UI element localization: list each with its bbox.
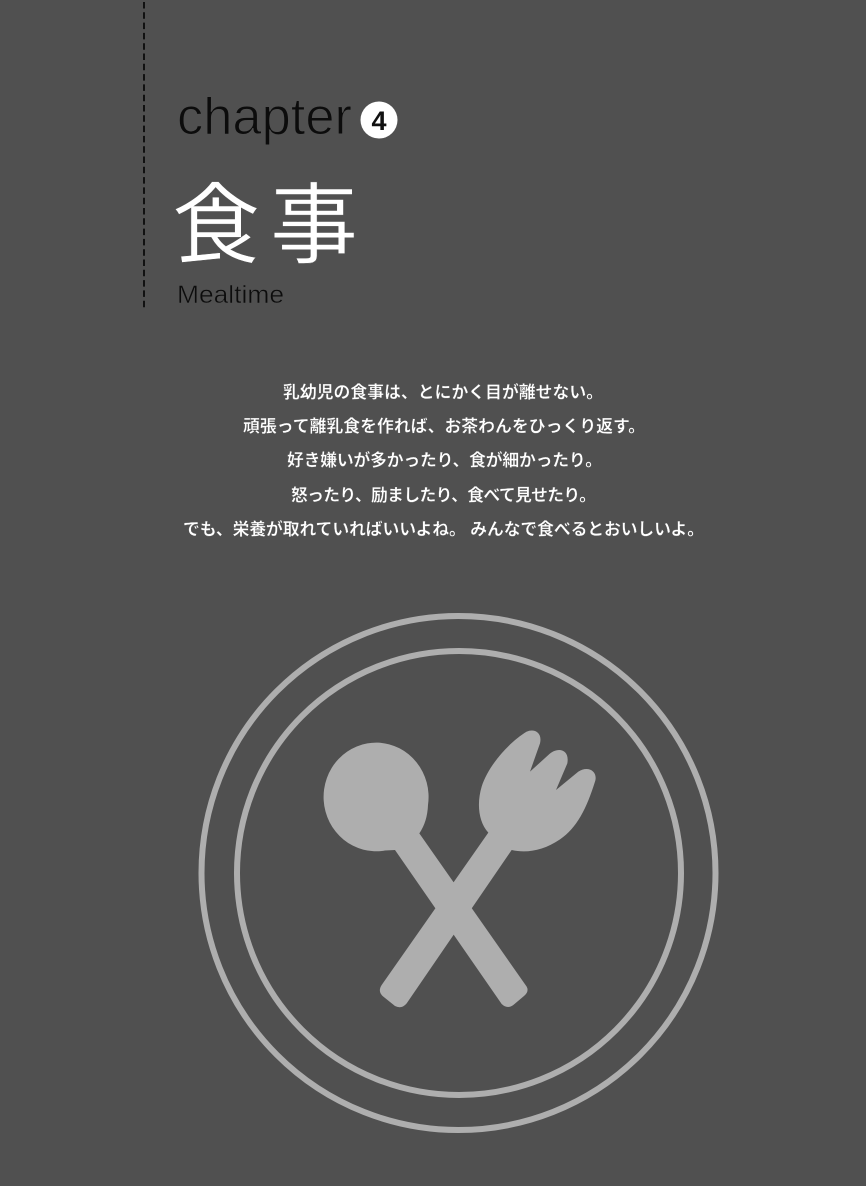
intro text block: 怒ったり、励ましたり、食べて見せたり。 [291, 486, 596, 505]
plate outer ring [202, 616, 716, 1130]
intro text block: でも、栄養が取れていればいいよね。 みんなで食べるとおいしいよ。 [183, 519, 704, 539]
heading: chapter label: chapter [177, 88, 352, 146]
icon: spoon [324, 743, 528, 1007]
intro text block: 乳幼児の食事は、とにかく目が離せない。 [283, 382, 603, 402]
icon: plate with spoon and fork [202, 616, 716, 1130]
plate inner ring [237, 651, 681, 1095]
icon: fork [380, 730, 596, 1007]
title: 食事: 食事 [172, 176, 358, 275]
subtitle: Mealtime: Mealtime [177, 281, 284, 309]
intro text block [183, 382, 704, 539]
intro text block: 頑張って離乳食を作れば、お茶わんをひっくり返す。 [243, 416, 645, 436]
intro text block: 好き嫌いが多かったり、食が細かったり。 [287, 450, 602, 470]
badge: chapter number 4: 4 [371, 106, 387, 136]
badge: chapter number 4 [360, 102, 398, 138]
